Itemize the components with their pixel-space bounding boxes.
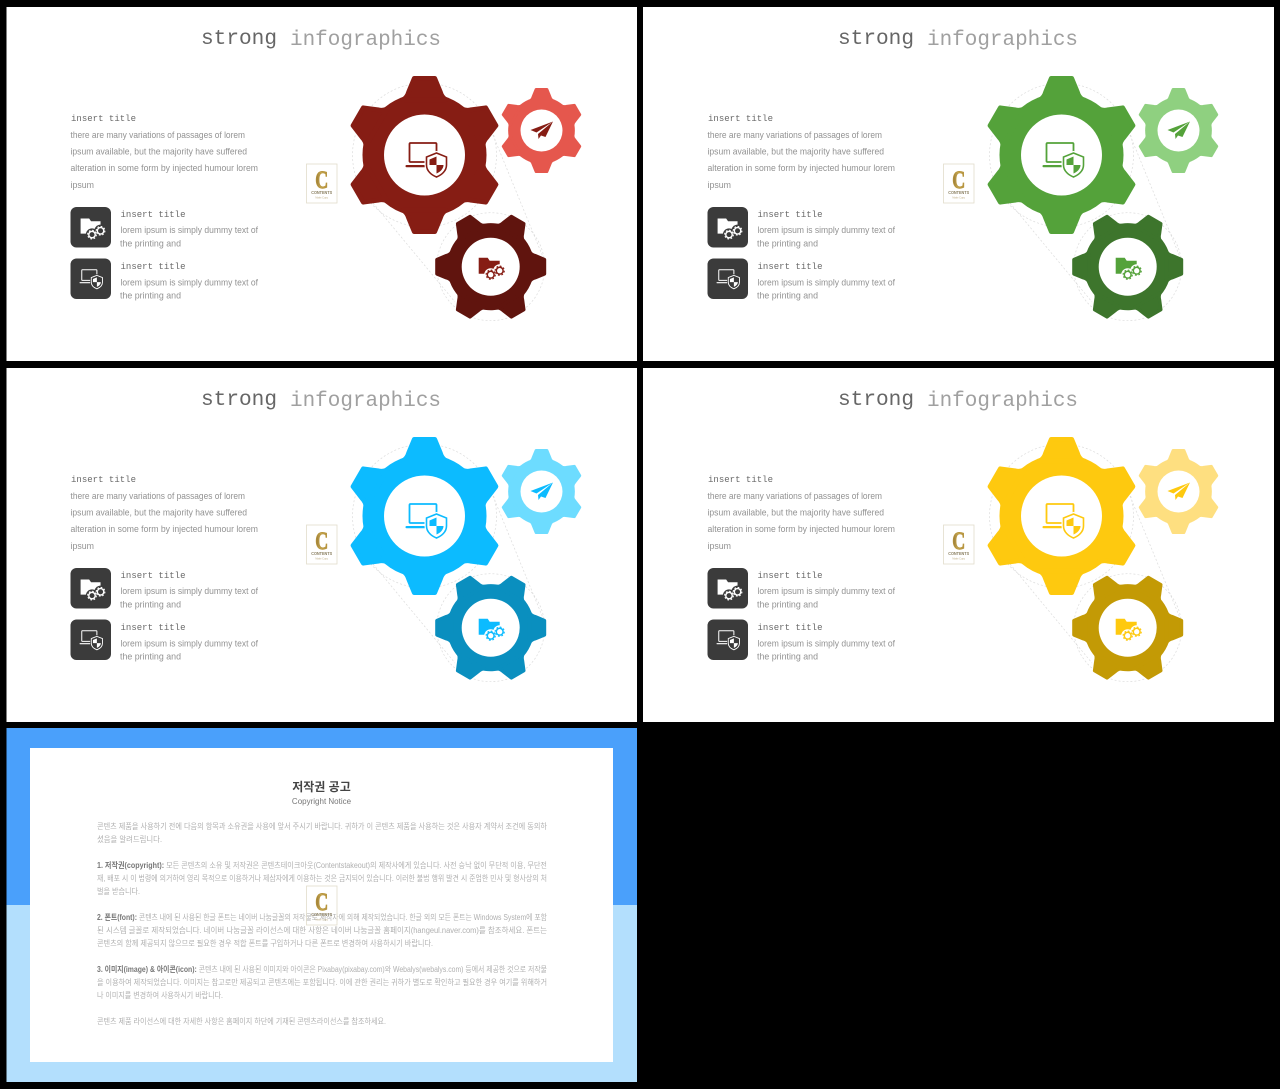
panel: copyright notice (6, 728, 637, 1082)
list item 1: the printing and (120, 238, 181, 250)
dotted connector outline (990, 83, 1182, 321)
intro text block: there are many variations of passages of lorem (708, 491, 882, 502)
intro text block: insert title (708, 114, 773, 124)
list item 2: insert title (120, 262, 186, 272)
title: infographics (290, 390, 441, 413)
list item 2: the printing and (757, 652, 818, 662)
notice footer line: 콘텐츠 제품 라이선스에 대한 자세한 사항은 홈페이지 하단에 기재된 콘텐츠라이선스를 참조하세요. (97, 1016, 386, 1026)
list item 2: lorem ipsum is simply dummy text of (758, 278, 895, 288)
notice intro: 콘텐츠 제품을 사용하기 전에 다음의 항목과 소유권을 사용에 앞서 주시기 바랍니다. 귀하가 이 콘텐츠 제품을 사용하는 것은 사용자 계약서 조건에 동의하 (97, 821, 548, 831)
logo watermark (306, 886, 337, 925)
intro text block: insert title (708, 475, 773, 485)
notice item 3: 나 이미지를 변경하여 사용하시기 바랍니다. (97, 990, 223, 1000)
gear: small paper plane (500, 450, 583, 533)
dotted connector outline (352, 444, 545, 682)
intro text block: ipsum available, but the majority have suffered (70, 146, 247, 158)
title: infographics (927, 29, 1078, 52)
panel: green infographic (643, 7, 1274, 361)
dotted connector outline (352, 83, 545, 321)
gear: small paper plane (1137, 89, 1220, 172)
title: strong (201, 28, 277, 51)
list item 2: the printing and (757, 290, 818, 302)
gear: medium folder (417, 554, 564, 701)
list item 1: lorem ipsum is simply dummy text of (120, 586, 258, 597)
icon: laptop shield tile (708, 258, 748, 299)
notice item 2: 된 시스템 글꼴로 제작되었습니다. 네이버 나눔글꼴 라이선스에 대한 사항은 네이버 나눔글꼴 홈페이지(hangeul.naver.com)를 참조하세요. 폰트는 (97, 925, 547, 935)
title: strong (201, 389, 277, 412)
list item 1 (120, 210, 258, 250)
list item 1: the printing and (757, 600, 818, 610)
list item 2 (757, 623, 895, 662)
logo watermark (944, 164, 974, 203)
intro text block: ipsum available, but the majority have suffered (708, 146, 884, 158)
gear: medium folder (417, 193, 564, 340)
intro text block (708, 475, 895, 552)
intro text block: alteration in some form by injected humour lorem (70, 163, 258, 174)
notice item 3: 3. 이미지(image) & 아이콘(icon): 콘텐츠 내에 된 사용된 이미지와 아이콘은 Pixabay(pixabay.com)와 Webalys(webalys.com) 등에서 제공한 것으로 저작물 (97, 964, 547, 974)
intro text block (708, 114, 895, 191)
title (838, 28, 1078, 52)
notice heading (292, 779, 352, 806)
intro text block: ipsum (708, 180, 731, 191)
logo watermark (306, 164, 337, 203)
notice item 1 (97, 860, 547, 896)
icon: folder tile (70, 568, 111, 608)
gear: large laptop shield (984, 78, 1139, 232)
title (838, 389, 1078, 413)
title: strong (838, 389, 914, 412)
list item 1 (757, 210, 895, 250)
intro text block: ipsum available, but the majority have suffered (708, 508, 884, 518)
intro text block: ipsum (708, 541, 731, 552)
notice intro (97, 821, 548, 844)
icon: laptop shield tile (70, 258, 111, 299)
gear: large laptop shield (347, 439, 502, 593)
intro text block (70, 475, 258, 552)
list item 1: the printing and (120, 600, 181, 610)
list item 2: the printing and (120, 652, 181, 662)
notice item 1: 재, 배포 시 이 법령에 의거하여 영리 목적으로 이용하거나 제삼자에게 이용하는 것은 금지되어 있습니다. 이러한 불법 행위 발견 시 준엄한 민사 및 형사상의 처 (97, 873, 547, 883)
list item 2: lorem ipsum is simply dummy text of (120, 638, 258, 650)
notice heading: 저작권 공고 (292, 779, 351, 794)
gear: small paper plane (500, 89, 583, 172)
gear: large laptop shield (984, 439, 1139, 593)
icon: folder tile (708, 568, 748, 608)
icon: laptop shield tile (708, 620, 748, 660)
intro text block: insert title (71, 475, 136, 485)
list item 1: insert title (758, 210, 822, 220)
intro text block: alteration in some form by injected humour lorem (708, 163, 895, 174)
notice item 2 (97, 912, 548, 948)
intro text block: there are many variations of passages of lorem (70, 130, 245, 141)
notice intro: 셨음을 알려드립니다. (97, 834, 162, 844)
list item 2 (757, 262, 895, 302)
list item 1: insert title (120, 571, 186, 581)
list item 1: the printing and (757, 238, 818, 250)
list item 1: lorem ipsum is simply dummy text of (758, 586, 895, 597)
dotted connector outline (990, 444, 1182, 682)
list item 1 (120, 571, 258, 610)
list item 1: insert title (120, 210, 186, 220)
intro text block: insert title (71, 114, 136, 124)
list item 2: lorem ipsum is simply dummy text of (120, 278, 258, 288)
panel: blue infographic (6, 368, 637, 722)
intro text block: there are many variations of passages of lorem (70, 491, 245, 502)
intro text block: ipsum (70, 541, 94, 552)
title: infographics (290, 29, 441, 52)
logo watermark (306, 525, 337, 564)
icon: folder tile (708, 207, 748, 248)
title: infographics (927, 390, 1078, 413)
title (201, 389, 441, 413)
list item 2 (120, 623, 258, 662)
notice item 2: 2. 폰트(font): 콘텐츠 내에 된 사용된 한글 폰트는 네이버 나눔글꼴의 저작물로 제작자에 의해 제작되었습니다. 한글 외의 모든 폰트는 Windows System에 포함 (97, 912, 548, 922)
list item 1: lorem ipsum is simply dummy text of (758, 225, 895, 236)
intro text block: alteration in some form by injected humour lorem (708, 524, 895, 535)
list item 1: insert title (758, 571, 822, 581)
intro text block: there are many variations of passages of lorem (708, 130, 882, 141)
title: strong (838, 28, 914, 51)
intro text block (70, 114, 258, 191)
intro text block: ipsum (70, 180, 94, 191)
list item 2: insert title (758, 623, 822, 633)
panel: red infographic (6, 7, 637, 361)
list item 2: insert title (120, 623, 186, 633)
icon: folder tile (70, 207, 111, 248)
list item 2 (120, 262, 258, 302)
notice heading: Copyright Notice (292, 797, 352, 806)
list item 2: the printing and (120, 290, 181, 302)
intro text block: ipsum available, but the majority have suffered (70, 508, 247, 518)
notice item 3 (97, 964, 547, 1000)
list item 2: lorem ipsum is simply dummy text of (758, 638, 895, 650)
list item 2: insert title (758, 262, 822, 272)
notice item 2: 콘텐츠의 함께 제공되지 않으므로 필요한 경우 적합 폰트를 구입하거나 다른 폰트로 변경하여 사용하시기 바랍니다. (97, 938, 433, 948)
notice item 3: 을 이용하여 제작되었습니다. 이미지는 참고로만 제공되고 콘텐츠에는 포함됩니다. 이에 관한 권리는 귀하가 별도로 확인하고 필요한 경우 여기를 위해하거 (97, 977, 547, 987)
gear: large laptop shield (347, 78, 502, 232)
logo watermark (944, 525, 974, 564)
gear: medium folder (1054, 193, 1201, 340)
list item 1: lorem ipsum is simply dummy text of (120, 225, 258, 236)
title (201, 28, 441, 52)
gear: small paper plane (1137, 450, 1220, 533)
icon: laptop shield tile (70, 620, 111, 660)
gear: medium folder (1054, 554, 1201, 701)
list item 1 (757, 571, 895, 610)
panel: yellow infographic (643, 368, 1274, 722)
notice item 1: 1. 저작권(copyright): 모든 콘텐츠의 소유 및 저작권은 콘텐츠테이크아웃(Contentstakeout)의 제작사에게 있습니다. 사전 승낙 없이 무단적 이용, 무단전 (97, 860, 547, 870)
intro text block: alteration in some form by injected humour lorem (70, 524, 258, 535)
notice item 1: 벌을 받습니다. (97, 886, 140, 896)
